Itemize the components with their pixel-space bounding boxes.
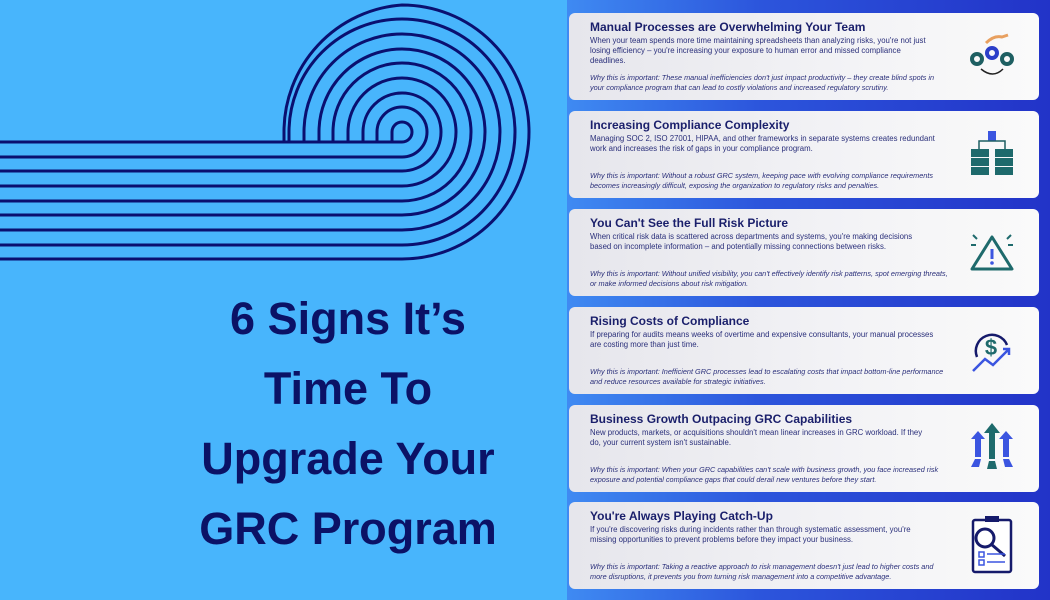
card: rising costs: Rising Costs of Compliance xyxy=(590,314,749,328)
card: catch-up: If you're discovering risks during incidents rather than through systematic assessment, you're missing opportunities to prevent problems before they impact your business. xyxy=(590,525,911,544)
icon: dollar growth: $ xyxy=(985,335,997,360)
card: compliance complexity: Managing SOC 2, ISO 27001, HIPAA, and other frameworks in separate systems creates redundant work and increases the risk of gaps in your compliance program. xyxy=(590,134,935,153)
card: business growth: New products, markets, or acquisitions shouldn't mean linear increases in GRC workload. If they do, your current system isn't sustainable. xyxy=(590,428,922,447)
card: catch-up: Why this is important: Taking a reactive approach to risk management doesn't just lead to higher costs and more disruptions, it prevents you from turning risk management into a competitive advantage. xyxy=(590,562,933,581)
card: business growth: Why this is important: When your GRC capabilities can't scale with business growth, you face increased risk exposure and potential compliance gaps that could derail new ventures before they start. xyxy=(590,465,938,484)
card: business growth xyxy=(569,405,1039,492)
card: business growth: Business Growth Outpacing GRC Capabilities xyxy=(590,412,852,426)
card: full risk picture: Why this is important: Without unified visibility, you can't effectively identify risk patterns, spot emerging threats, or make informed decisions about risk mitigation. xyxy=(590,269,948,288)
card: rising costs xyxy=(569,307,1039,394)
title: 6 Signs It’s xyxy=(230,293,466,344)
card: full risk picture: When critical risk data is scattered across departments and systems, you're making decisions based on incomplete information – and potentially missing connections between risks. xyxy=(590,232,912,251)
icon: clipboard with magnifier xyxy=(972,516,1012,574)
icon: up arrows xyxy=(971,423,1013,469)
card: full risk picture xyxy=(569,209,1039,296)
icon: gears xyxy=(970,34,1014,75)
card: full risk picture: You Can't See the Full Risk Picture xyxy=(590,216,788,230)
card: manual processes: Manual Processes are Overwhelming Your Team xyxy=(590,20,865,34)
panel: signs list xyxy=(567,0,1050,600)
icon: warning triangle xyxy=(970,234,1014,270)
icon: dollar growth xyxy=(972,334,1010,372)
title: Time To xyxy=(264,363,432,414)
card: manual processes: When your team spends more time maintaining spreadsheets than analyzing risks, you're not just losing efficiency – you're increasing your exposure to human error and missed compliance deadlines. xyxy=(590,36,926,65)
title xyxy=(199,293,497,554)
card: catch-up xyxy=(569,502,1039,589)
card: manual processes xyxy=(569,13,1039,100)
card: rising costs: Why this is important: Inefficient GRC processes lead to escalating costs that impact bottom-line performance and reduce resources available for strategic initiatives. xyxy=(590,367,943,386)
card: compliance complexity xyxy=(569,111,1039,198)
card: compliance complexity: Why this is important: Without a robust GRC system, keeping pace with evolving compliance requirements becomes increasingly difficult, exposing the organization to regulatory risks and penalties. xyxy=(590,171,933,190)
card: manual processes: Why this is important: These manual inefficiencies don't just impact productivity – they create blind spots in your compliance program that can lead to costly violations and increased regulatory scrutiny. xyxy=(590,73,934,92)
card: compliance complexity: Increasing Compliance Complexity xyxy=(590,118,789,132)
title: GRC Program xyxy=(199,503,497,554)
icon: servers xyxy=(971,131,1013,175)
card: catch-up: You're Always Playing Catch-Up xyxy=(590,509,773,523)
card: rising costs: If preparing for audits means weeks of overtime and expensive consultants, your manual processes are costing more than just time. xyxy=(590,330,933,349)
title: Upgrade Your xyxy=(201,433,495,484)
spiral line graphic xyxy=(0,4,530,260)
